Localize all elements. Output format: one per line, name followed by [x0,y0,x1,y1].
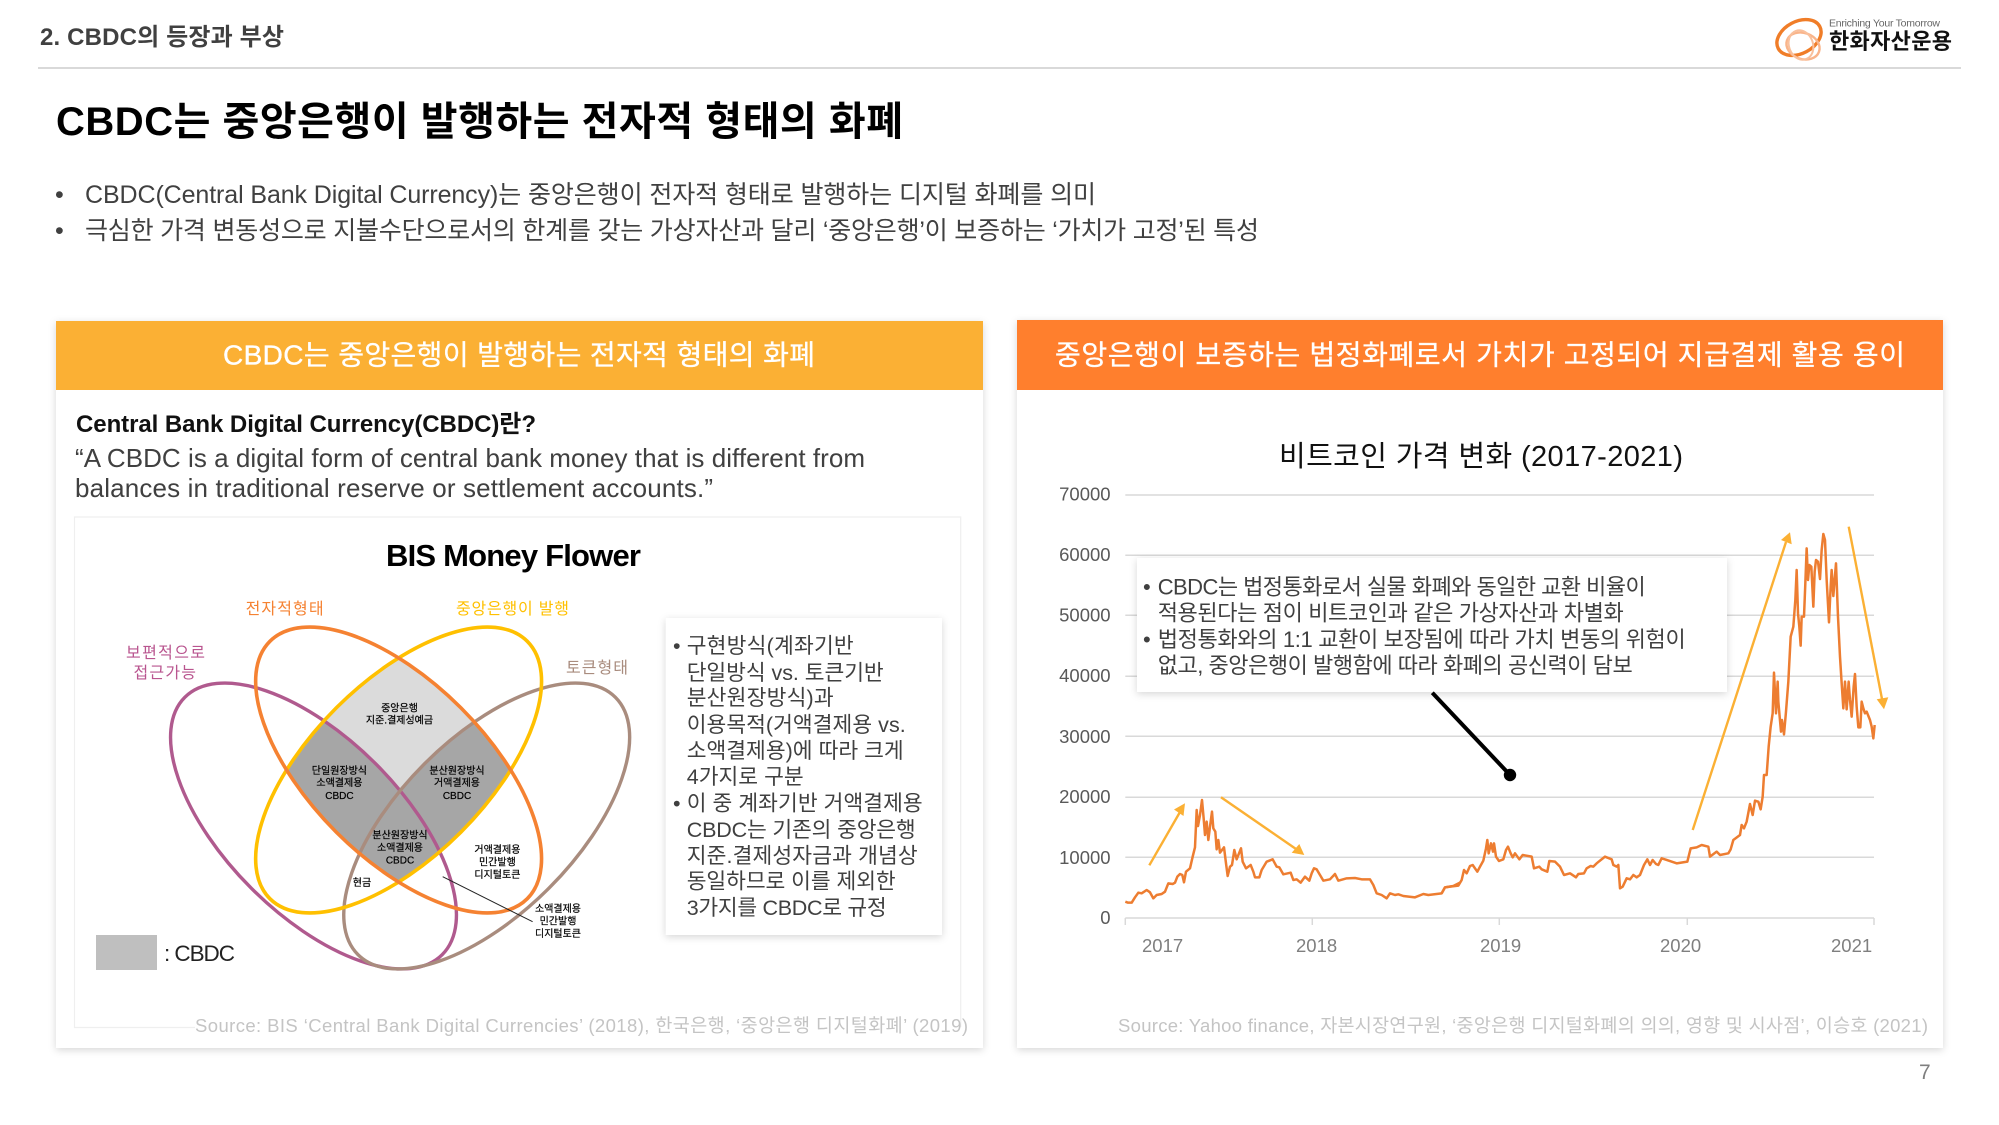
x axis labels: 2019 [1480,935,1521,956]
venn set labels: 접근가능 [134,664,196,682]
venn region labels: 중앙은행 [381,702,418,714]
explanation box: 이 중 계좌기반 거액결제용 [687,792,923,816]
venn set labels: 토큰형태 [566,659,628,677]
inner figure frame [74,517,961,1028]
venn region labels: 소액결제용 [316,777,362,789]
callout: CBDC vs crypto: • [1143,574,1151,600]
definition heading: Central Bank Digital Currency(CBDC)란? [76,411,536,438]
price line [1125,534,1875,903]
venn region labels: 소액결제용 [535,903,581,915]
venn region labels: 디지털토큰 [474,869,520,881]
x axis labels: 2017 [1142,935,1183,956]
y axis labels: 40000 [1059,665,1111,686]
intro bullets: • [55,217,64,245]
logo: Hanwha Asset Management: Enriching Your Tomorrow [1829,18,1940,30]
venn region labels: CBDC [386,856,414,866]
venn set labels: 보편적으로 [126,644,205,662]
y axis labels: 10000 [1059,847,1111,868]
venn set labels: 중앙은행이 발행 [456,600,569,618]
panel header [1017,320,1943,390]
source note right: Source: Yahoo finance, 자본시장연구원, ‘중앙은행 디지털화폐의 의의, 영향 및 시사점’, 이승호 (2021) [1118,1015,1928,1036]
x axis labels: 2021 [1831,935,1872,956]
venn region labels: 디지털토큰 [535,928,581,940]
figure title: BIS Money Flower [386,538,641,573]
callout: CBDC vs crypto: • [1143,627,1151,652]
explanation box: 3가지를 CBDC로 규정 [687,896,887,920]
venn region labels: 분산원장방식 [372,830,428,842]
line chart: bitcoin price 2017-2021 [1059,484,1888,956]
venn region labels: 현금 [353,877,371,889]
venn set labels: 전자적형태 [246,600,324,618]
y axis labels: 70000 [1059,484,1111,504]
logo: Hanwha Asset Management: 한화자산운용 [1829,29,1952,54]
y axis labels: 50000 [1059,604,1111,626]
y axis labels: 30000 [1059,726,1111,747]
explanation box: 이용목적(거액결제용 vs. [687,713,906,737]
trend arrows [1149,527,1888,865]
explanation box: • [673,634,681,658]
venn region labels: 거액결제용 [434,777,480,789]
definition quote [75,443,865,503]
x axis labels [1142,935,1872,956]
venn region labels [312,702,581,940]
panel: Bitcoin price [1017,320,1943,1048]
explanation box [666,618,942,935]
callout: CBDC vs crypto: 적용된다는 점이 비트코인과 같은 가상자산과 차별화 [1158,600,1624,626]
explanation box: 분산원장방식)과 [687,686,834,710]
venn region labels: 분산원장방식 [429,765,485,777]
gridlines [1125,495,1874,925]
section heading: 2. CBDC의 등장과 부상 [40,24,284,51]
y axis labels [1059,484,1111,928]
explanation box: 단일방식 vs. 토큰기반 [687,661,884,685]
intro bullets [55,181,1259,245]
intro bullets: CBDC(Central Bank Digital Currency)는 중앙은행이 전자적 형태로 발행하는 디지털 화폐를 의미 [85,181,1096,209]
explanation box: • [673,792,681,816]
page number: 7 [1919,1061,1931,1084]
explanation box: 4가지로 구분 [687,765,804,789]
callout: CBDC vs crypto [1137,558,1727,692]
venn region labels: 민간발행 [479,856,516,868]
y axis labels: 0 [1100,907,1111,928]
callout: CBDC vs crypto: 없고, 중앙은행이 발행함에 따라 화폐의 공신력이 담보 [1158,653,1633,678]
panel header: 중앙은행이 보증하는 법정화폐로서 가치가 고정되어 지급결제 활용 용이 [1055,340,1905,370]
explanation box: 지준.결제성자금과 개념상 [687,844,918,868]
definition quote: balances in traditional reserve or settlement accounts.” [75,473,713,503]
venn region labels: 거액결제용 [474,844,520,856]
source note left: Source: BIS ‘Central Bank Digital Currencies’ (2018), 한국은행, ‘중앙은행 디지털화폐’ (2019) [195,1015,968,1036]
intro bullets: 극심한 가격 변동성으로 지불수단으로서의 한계를 갖는 가상자산과 달리 ‘중앙은행’이 보증하는 ‘가치가 고정’된 특성 [85,217,1259,245]
legend: CBDC [96,935,235,970]
explanation box: CBDC는 기존의 중앙은행 [687,818,916,842]
intro bullets: • [55,181,64,209]
callout: CBDC vs crypto: 법정통화와의 1:1 교환이 보장됨에 따라 가치 변동의 위험이 [1158,627,1686,652]
y axis labels: 60000 [1059,544,1111,565]
venn region labels: 단일원장방식 [312,765,367,777]
venn region labels: CBDC [325,791,354,802]
callout: CBDC vs crypto: CBDC는 법정통화로서 실물 화폐와 동일한 교환 비율이 [1158,574,1646,600]
definition quote: “A CBDC is a digital form of central bank money that is different from [75,443,865,473]
legend: CBDC: : CBDC [164,941,235,966]
x axis labels: 2018 [1296,935,1337,956]
venn region labels: 소액결제용 [377,842,423,854]
panel: CBDC definition [56,321,983,1048]
explanation box: 소액결제용)에 따라 크게 [687,739,904,763]
panel header [56,321,983,390]
main title: CBDC는 중앙은행이 발행하는 전자적 형태의 화폐 [56,100,903,144]
explanation box: 구현방식(계좌기반 [687,634,854,658]
y axis labels: 20000 [1059,786,1111,807]
venn diagram: BIS money flower [126,600,632,971]
venn set labels [126,600,628,682]
venn region labels: 민간발행 [540,916,576,928]
x axis labels: 2020 [1660,935,1701,956]
chart title: 비트코인 가격 변화 (2017-2021) [1279,441,1683,473]
venn region labels: CBDC [443,791,471,802]
venn region labels: 지준.결제성예금 [366,714,433,726]
panel header: CBDC는 중앙은행이 발행하는 전자적 형태의 화폐 [223,340,815,370]
callout leader line [1432,693,1516,781]
logo: Hanwha Asset Management [1771,12,1952,64]
explanation box: 동일하므로 이를 제외한 [687,870,896,894]
